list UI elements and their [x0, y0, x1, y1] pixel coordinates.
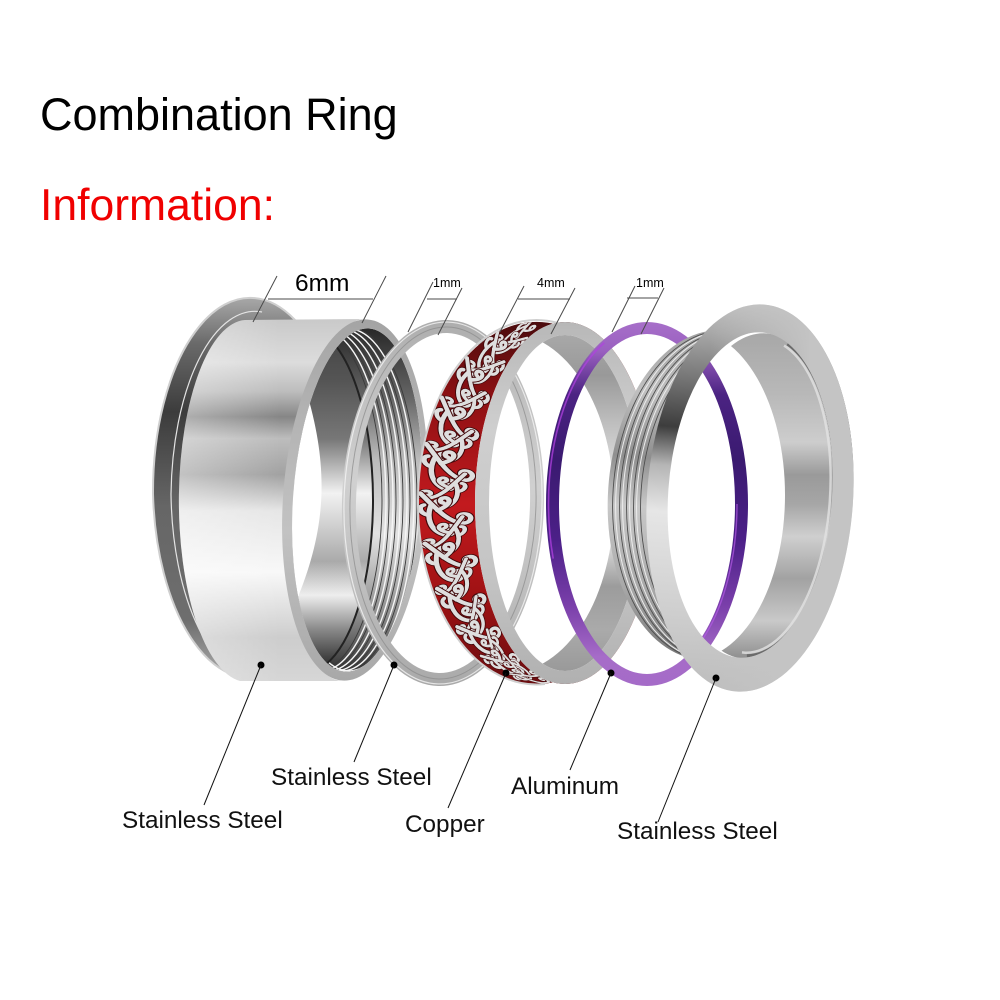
ring 1 interior with threads [292, 328, 422, 672]
ring 3 front rim [475, 322, 655, 684]
ring 3 inner wall [542, 335, 628, 671]
callout: stainless steel domed ring [617, 674, 778, 845]
ring 1 flange [153, 298, 295, 678]
subheading: information: Information: [40, 181, 275, 230]
callout: aluminum: Aluminum [511, 773, 619, 800]
dimension: 1mm steel: 1mm [433, 276, 461, 290]
dimension: 1mm aluminum [612, 276, 664, 334]
ring 1: wide stainless steel core [153, 298, 439, 686]
ring 3 scroll band [418, 322, 655, 684]
ring 4: purple aluminum ring [546, 322, 748, 686]
callout: copper: Copper [405, 811, 485, 838]
ring 5 inner wall [722, 333, 833, 658]
dimension: 1mm aluminum: 1mm [636, 276, 664, 290]
callout: stainless steel thin ring [271, 662, 432, 791]
title: Combination Ring [40, 89, 398, 140]
dimension: 1mm steel [408, 276, 462, 335]
ring 1 front rim [271, 314, 439, 686]
dimension: 6mm [253, 270, 386, 323]
ring 5 threaded sleeve [597, 323, 724, 660]
ring 5: domed stainless steel ring with threaded sleeve [608, 304, 854, 692]
callout: stainless steel core: Stainless Steel [122, 807, 283, 834]
dimension: 4mm: 4mm [537, 276, 565, 290]
callout: stainless steel domed ring: Stainless Steel [617, 818, 778, 845]
callout: copper [405, 670, 510, 838]
ring 5 domed front [634, 297, 866, 699]
ring 3: copper band with red enamel scrollwork [417, 319, 636, 686]
callout: aluminum [511, 670, 619, 800]
ring 2: thin stainless steel ring [337, 317, 549, 689]
callout: stainless steel core [122, 662, 283, 834]
dimension: 4mm [500, 276, 575, 334]
dimension: 6mm: 6mm [295, 270, 349, 297]
callout: stainless steel thin ring: Stainless Steel [271, 764, 432, 791]
ring 1 body [179, 319, 366, 681]
